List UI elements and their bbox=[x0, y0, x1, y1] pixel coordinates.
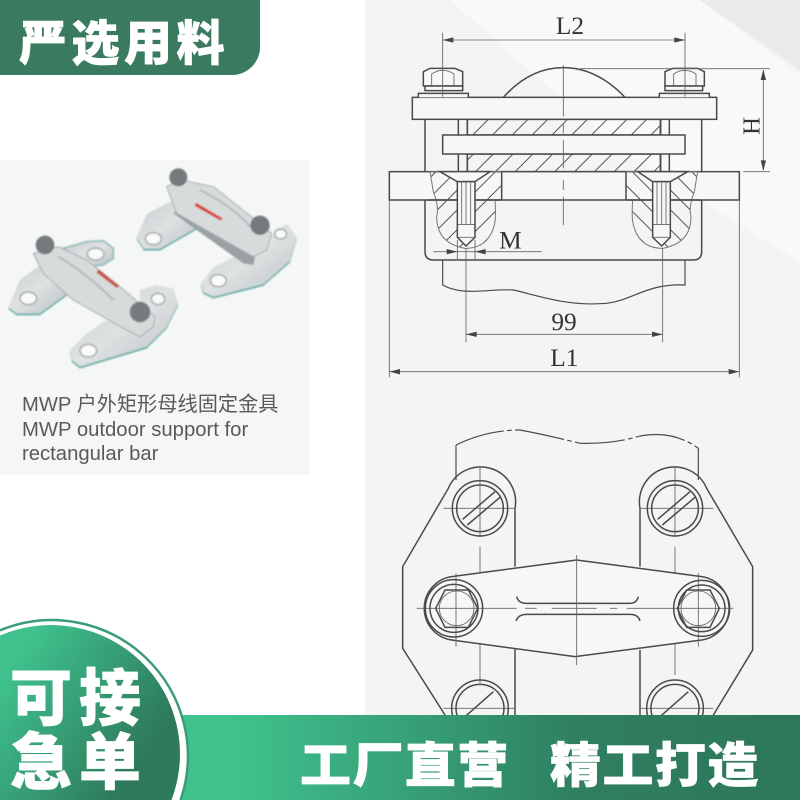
dimension: 99 bbox=[466, 248, 663, 342]
screw: upper left bbox=[452, 481, 508, 536]
caption: product name: MWP outdoor support for bbox=[22, 419, 248, 441]
dimension: H bbox=[580, 69, 770, 172]
top plate bbox=[412, 97, 717, 119]
panel: product photo bbox=[0, 160, 310, 475]
bolt assembly: right bbox=[626, 68, 709, 248]
bracket: rear bbox=[137, 168, 297, 299]
slogan: fine craftsmanship: 精工打造 bbox=[550, 739, 760, 793]
heading: strict material selection: 严选用料 bbox=[19, 18, 229, 71]
panel: drawing background bbox=[365, 0, 800, 715]
caption: product name bbox=[22, 393, 278, 465]
outline: dashed top edge bbox=[456, 430, 698, 480]
body outline bbox=[425, 119, 702, 260]
badge: rush orders accepted bbox=[0, 620, 188, 800]
badge text line 1: 可接 bbox=[10, 665, 148, 734]
middle bar bbox=[443, 135, 685, 154]
screw: lower right bbox=[646, 679, 704, 715]
caption: product name: rectangular bar bbox=[22, 443, 159, 465]
photo: metal brackets bbox=[8, 168, 297, 369]
screw: upper right bbox=[647, 481, 703, 536]
bolt assembly: left bbox=[418, 68, 502, 248]
centre lines bbox=[443, 467, 713, 708]
dimension: L2 bbox=[443, 12, 685, 97]
lower wavy section bbox=[443, 260, 685, 304]
dimension: L2: L2 bbox=[556, 12, 584, 40]
screw: lower left bbox=[450, 679, 510, 715]
slogan: factory direct: 工厂直营 bbox=[300, 739, 510, 793]
caption: product name: MWP 户外矩形母线固定金具 bbox=[22, 393, 278, 416]
footer band bbox=[170, 715, 800, 800]
badge text line 2: 急单 bbox=[10, 729, 148, 798]
panel: header tag bbox=[0, 0, 260, 75]
link plate bbox=[417, 555, 733, 665]
dimension: M: M bbox=[499, 227, 522, 255]
dimension: L1: L1 bbox=[550, 344, 578, 372]
hatched clamp bars bbox=[467, 119, 661, 172]
chart: sectional elevation drawing bbox=[389, 12, 770, 377]
dome bbox=[503, 68, 625, 97]
dimension: H: H bbox=[738, 117, 765, 135]
bolt head: right bbox=[674, 580, 730, 636]
dimension: 99: 99 bbox=[551, 308, 577, 336]
bolt head: left bbox=[425, 580, 483, 637]
centre line bbox=[562, 65, 565, 225]
dimension: M bbox=[433, 227, 542, 261]
dimension: L1 bbox=[389, 200, 739, 377]
plate: left bbox=[403, 467, 516, 715]
plate: right bbox=[639, 467, 753, 715]
bracket: front bbox=[8, 236, 178, 369]
base plate bbox=[389, 172, 739, 200]
chart: plan view drawing bbox=[403, 430, 753, 737]
